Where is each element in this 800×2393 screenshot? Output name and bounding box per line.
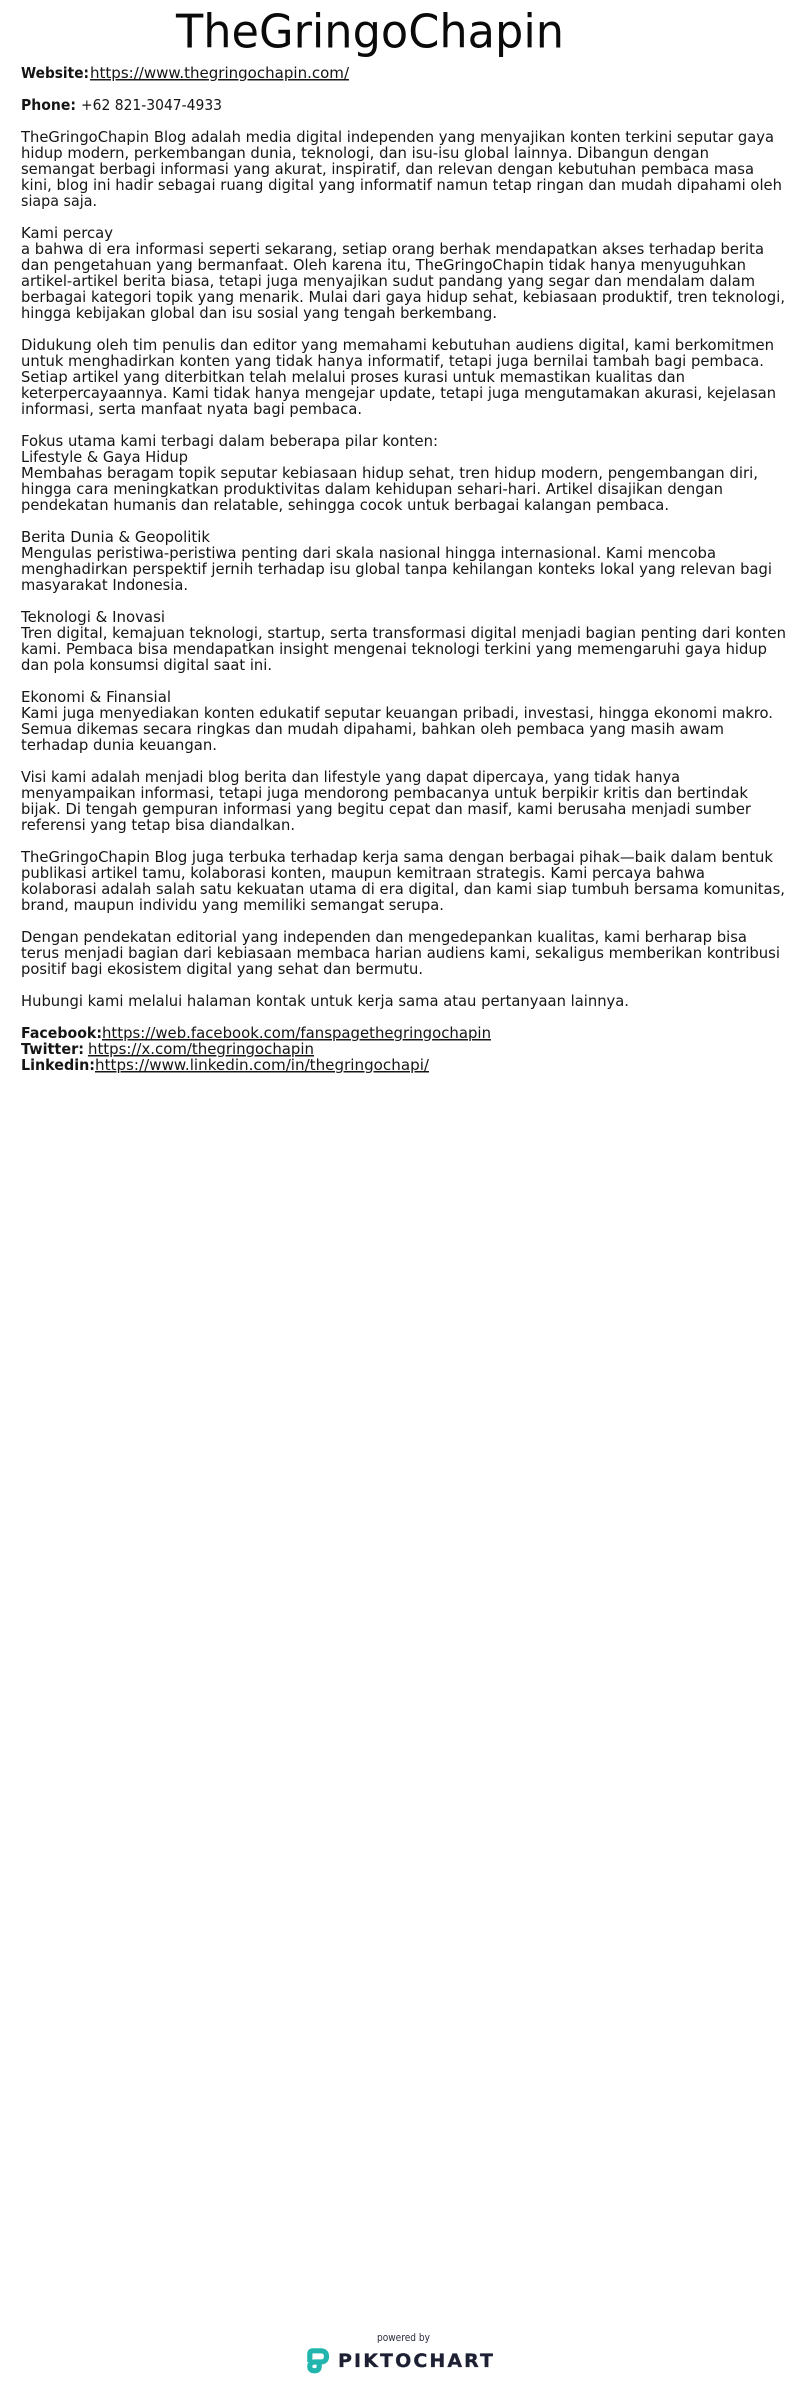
text block: pendekatan editorial	[21, 928, 780, 978]
text block: lifestyle pillar: hingga cara meningkatkan produktivitas dalam kehidupan sehari-hari. Artikel disajikan dengan	[21, 480, 723, 498]
text block: ekonomi pillar: Semua dikemas secara ringkas dan mudah dipahami, bahkan oleh pembaca yang masih awam	[21, 720, 724, 738]
text block: kami percaya: berbagai kategori topik yang menarik. Mulai dari gaya hidup sehat, kebiasaan produktif, tren teknologi,	[21, 288, 785, 306]
text block: visi: menyampaikan informasi, tetapi juga mendorong pembacanya untuk berpikir kritis dan bertindak	[21, 784, 748, 802]
text block: teknologi pillar: Tren digital, kemajuan teknologi, startup, serta transformasi digital menjadi bagian penting dari konten	[20, 624, 786, 642]
text block: kerja sama: TheGringoChapin Blog juga terbuka terhadap kerja sama dengan berbagai pihak—baik dalam bentuk	[20, 848, 773, 866]
text block: ekonomi pillar: Ekonomi & Finansial	[21, 688, 171, 706]
text block: ekonomi pillar	[21, 688, 773, 754]
text block: berita dunia pillar	[21, 528, 772, 594]
social media links: Facebook:	[21, 1024, 102, 1042]
text block: visi: referensi yang tetap bisa diandalkan.	[21, 816, 295, 834]
text block: kami percaya: Kami percay	[21, 224, 113, 242]
text block: ekonomi pillar: Kami juga menyediakan konten edukatif seputar keuangan pribadi, investasi, hingga ekonomi makro.	[21, 704, 773, 722]
icon: piktochart logo mark	[310, 2351, 326, 2371]
text block: kerja sama	[20, 848, 785, 914]
social media links: https://web.facebook.com/fanspagethegringochapin	[102, 1024, 491, 1042]
text block: visi: bijak. Di tengah gempuran informasi yang begitu cepat dan masif, kami berusaha menjadi sumber	[21, 800, 752, 818]
text block: introduction: hidup modern, perkembangan dunia, teknologi, dan isu-isu global lainnya. Dibangun dengan	[21, 144, 709, 162]
text block: lifestyle pillar	[21, 432, 758, 514]
text block: teknologi pillar: dan pola konsumsi digital saat ini.	[21, 656, 272, 674]
title: TheGringoChapin	[175, 4, 564, 58]
text block: introduction: kini, blog ini hadir sebagai ruang digital yang informatif namun tetap ringan dan mudah dipahami oleh	[21, 176, 782, 194]
text block: berita dunia pillar: menghadirkan perspektif jernih terhadap isu global tanpa kehilangan konteks lokal yang relevan bagi	[21, 560, 772, 578]
social media links	[21, 1024, 491, 1074]
piktochart wordmark: PIKTOCHART	[338, 2350, 493, 2372]
text block: kerja sama: brand, maupun individu yang memiliki semangat serupa.	[21, 896, 444, 914]
social media links: Linkedin:	[21, 1056, 95, 1074]
text block: lifestyle pillar: pendekatan humanis dan relatable, sehingga cocok untuk berbagai kalangan pembaca.	[21, 496, 669, 514]
text block: tim penulis: Didukung oleh tim penulis dan editor yang memahami kebutuhan audiens digital, kami berkomitmen	[21, 336, 774, 354]
phone contact line	[21, 96, 222, 114]
text block: teknologi pillar	[20, 608, 786, 674]
text block: pendekatan editorial: Dengan pendekatan editorial yang independen dan mengedepankan kualitas, kami berharap bisa	[21, 928, 747, 946]
text block: tim penulis: Setiap artikel yang diterbitkan telah melalui proses kurasi untuk memastikan kualitas dan	[21, 368, 685, 386]
text block: berita dunia pillar: Berita Dunia & Geopolitik	[21, 528, 210, 546]
text block: tim penulis: keterpercayaannya. Kami tidak hanya mengejar update, tetapi juga mengutamakan akurasi, kejelasan	[21, 384, 776, 402]
text block: tim penulis	[21, 336, 776, 418]
text block: kerja sama: kolaborasi adalah salah satu kekuatan utama di era digital, dan kami siap tumbuh bersama komunitas,	[21, 880, 785, 898]
powered by label: powered by	[377, 2332, 430, 2344]
social media links: https://www.linkedin.com/in/thegringochapi/	[95, 1056, 430, 1074]
text block: teknologi pillar: Teknologi & Inovasi	[20, 608, 165, 626]
text block: introduction: siapa saja.	[21, 192, 97, 210]
text block: lifestyle pillar: Lifestyle & Gaya Hidup	[21, 448, 188, 466]
text block: kami percaya	[21, 224, 785, 322]
text block: teknologi pillar: kami. Pembaca bisa mendapatkan insight mengenai teknologi terkini yang memengaruhi gaya hidup	[21, 640, 767, 658]
text block: berita dunia pillar: Mengulas peristiwa-peristiwa penting dari skala nasional hingga internasional. Kami mencoba	[21, 544, 716, 562]
text block: pendekatan editorial: terus menjadi bagian dari kebiasaan membaca harian audiens kami, sekaligus memberikan kontribusi	[21, 944, 780, 962]
text block: kami percaya: artikel-artikel berita biasa, tetapi juga menyajikan sudut pandang yang segar dan mendalam dalam	[21, 272, 755, 290]
text block: hubungi kami: Hubungi kami melalui halaman kontak untuk kerja sama atau pertanyaan lainnya.	[21, 992, 629, 1010]
social media links: https://x.com/thegringochapin	[88, 1040, 314, 1058]
text block: introduction	[20, 128, 782, 210]
phone contact line: +62 821-3047-4933	[81, 96, 222, 114]
text block: visi: Visi kami adalah menjadi blog berita dan lifestyle yang dapat dipercaya, yang tidak hanya	[21, 768, 680, 786]
text block: introduction: semangat berbagi informasi yang akurat, inspiratif, dan relevan dengan kebutuhan pembaca masa	[21, 160, 754, 178]
text block: visi	[21, 768, 752, 834]
text block: tim penulis: informasi, serta manfaat nyata bagi pembaca.	[21, 400, 362, 418]
website contact line: Website:	[21, 64, 89, 82]
text block: lifestyle pillar: Membahas beragam topik seputar kebiasaan hidup sehat, tren hidup modern, pengembangan diri,	[21, 464, 758, 482]
website contact line: https://www.thegringochapin.com/	[90, 64, 350, 82]
text block: kerja sama: publikasi artikel tamu, kolaborasi konten, maupun kemitraan strategis. Kami percaya bahwa	[21, 864, 705, 882]
text block: kami percaya: dan pengetahuan yang bermanfaat. Oleh karena itu, TheGringoChapin tidak hanya menyuguhkan	[21, 256, 746, 274]
text block: kami percaya: a bahwa di era informasi seperti sekarang, setiap orang berhak mendapatkan akses terhadap berita	[21, 240, 764, 258]
text block: introduction: TheGringoChapin Blog adalah media digital independen yang menyajikan konten terkini seputar gaya	[20, 128, 774, 146]
text block: kami percaya: hingga kebijakan global dan isu sosial yang tengah berkembang.	[21, 304, 497, 322]
text block: lifestyle pillar: Fokus utama kami terbagi dalam beberapa pilar konten:	[21, 432, 438, 450]
phone contact line: Phone:	[21, 96, 76, 114]
social media links: Twitter:	[21, 1040, 84, 1058]
text block: berita dunia pillar: masyarakat Indonesia.	[21, 576, 188, 594]
text block: pendekatan editorial: positif bagi ekosistem digital yang sehat dan bermutu.	[21, 960, 423, 978]
text block: tim penulis: untuk menghadirkan konten yang tidak hanya informatif, tetapi juga bernilai tambah bagi pembaca.	[21, 352, 764, 370]
text block: ekonomi pillar: terhadap dunia keuangan.	[21, 736, 217, 754]
